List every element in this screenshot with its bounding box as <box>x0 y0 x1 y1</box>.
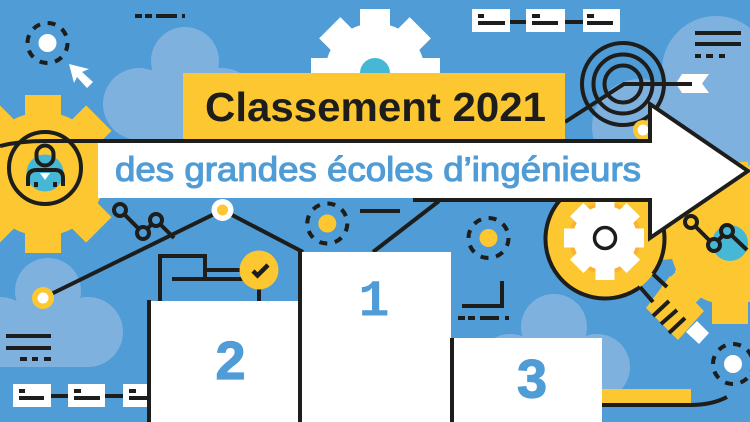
gap between bulb and gear <box>640 259 676 292</box>
dashed circle yellow centre <box>307 204 347 244</box>
title: Classement 2021 <box>205 84 546 130</box>
podium: first place: 1 <box>358 272 390 332</box>
icon: white gear top centre <box>311 9 440 137</box>
dash row top <box>135 14 185 18</box>
dashed circle bottom right <box>713 344 750 384</box>
icon: document with check <box>160 250 278 301</box>
icon: yellow gear right <box>651 162 750 324</box>
podium: first place <box>298 251 451 422</box>
icon: dashed circle top left <box>28 23 68 63</box>
icon: target with arrow <box>565 43 709 125</box>
left squiggle connector <box>114 204 174 239</box>
podium: second place: 2 <box>215 331 246 391</box>
cloud: bottom left <box>0 258 123 367</box>
right squiggle connector <box>685 216 747 251</box>
cloud: bottom right <box>477 294 630 400</box>
podium: third place: 3 <box>517 350 547 410</box>
node: white <box>212 199 234 221</box>
subtitle: des grandes écoles d’ingénieurs <box>115 151 641 189</box>
node: yellow <box>32 287 54 309</box>
icon: person in circle <box>9 132 81 204</box>
text lines bottom left <box>6 334 51 361</box>
icon: arrow banner <box>0 104 748 238</box>
cloud: top right <box>592 16 750 175</box>
flow of boxes bottom left <box>13 384 149 407</box>
icon: light bulb <box>545 179 709 344</box>
flow of boxes top <box>472 9 620 32</box>
text lines top right <box>695 31 741 58</box>
short line <box>360 209 400 213</box>
line to winner podium <box>373 201 439 252</box>
podium: third place <box>450 338 602 422</box>
connecting line over podium <box>43 210 303 298</box>
node behind arrow <box>633 120 653 140</box>
yellow bar and curve <box>600 389 727 405</box>
yellow banner <box>183 73 565 140</box>
icon: cursor arrow <box>69 64 93 88</box>
icon: yellow gear left <box>0 95 122 253</box>
podium: second place <box>147 300 298 422</box>
cloud: top left <box>103 27 258 140</box>
corner line and dashes <box>458 281 509 320</box>
dashed circle yellow right <box>468 218 508 258</box>
